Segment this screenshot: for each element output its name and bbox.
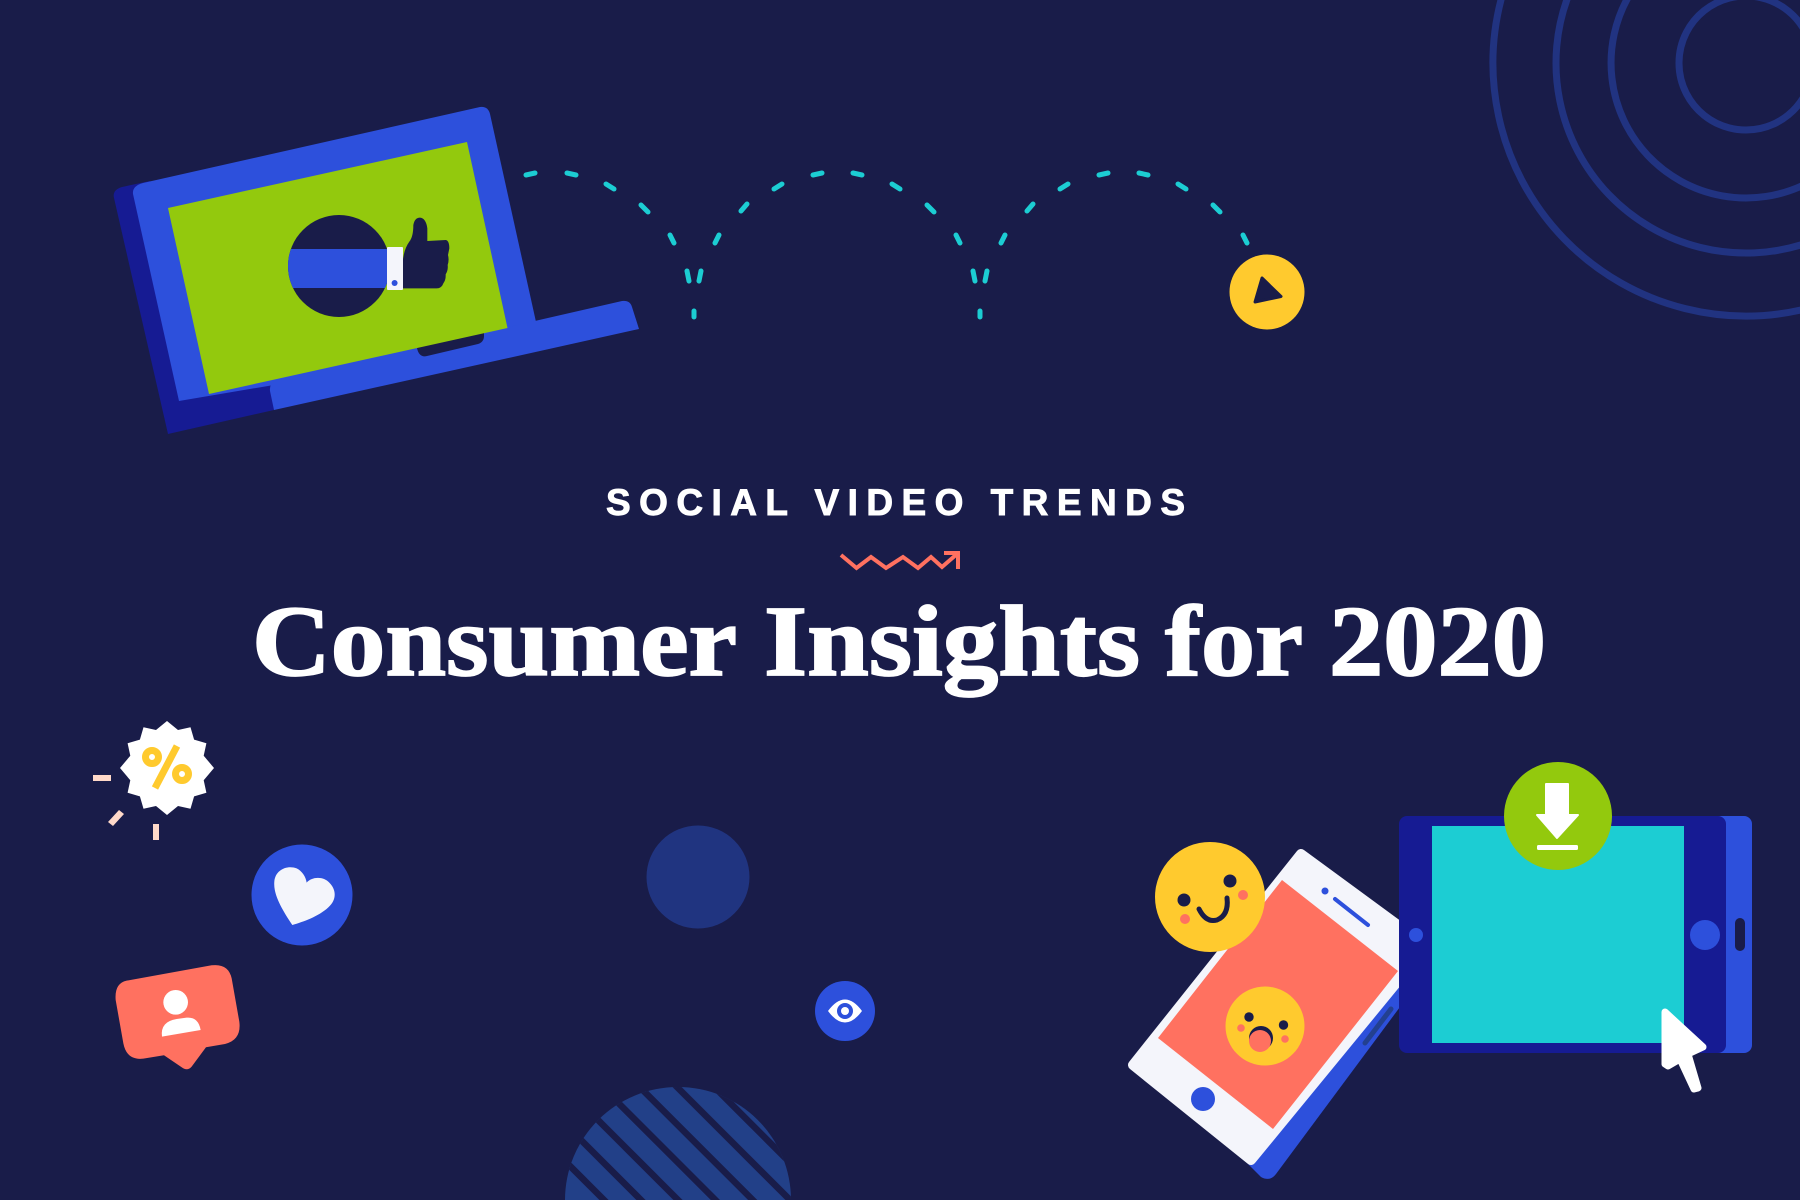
arm sleeve xyxy=(285,249,389,288)
icon: profile speech bubble xyxy=(116,965,240,1069)
concentric rings xyxy=(1493,0,1800,316)
laptop shadow side xyxy=(114,181,300,434)
icon: trending zigzag arrow xyxy=(841,553,958,569)
tablet slot xyxy=(1735,918,1745,951)
phone body xyxy=(1133,854,1425,1160)
phone illustration xyxy=(1133,854,1425,1179)
subtitle: SOCIAL VIDEO TRENDS xyxy=(606,482,1185,523)
tablet home button xyxy=(1690,920,1720,950)
laptop illustration xyxy=(114,107,639,434)
tablet left dot xyxy=(1409,928,1423,942)
dashed bounce path xyxy=(526,173,1247,317)
tablet illustration xyxy=(1399,816,1752,1053)
striped semicircle xyxy=(565,1087,791,1200)
title: Consumer xyxy=(252,585,737,697)
title: 2020 xyxy=(1329,585,1546,697)
percent sign xyxy=(146,746,188,788)
icon: eye badge xyxy=(815,981,875,1041)
icon: heart badge xyxy=(252,844,352,946)
laptop base xyxy=(270,301,639,410)
phone slit xyxy=(1365,1009,1391,1043)
surprised face emoji xyxy=(1226,986,1304,1066)
phone speaker line xyxy=(1335,899,1368,925)
phone home button xyxy=(1191,1087,1215,1111)
phone screen xyxy=(1158,880,1398,1129)
badge burst xyxy=(120,721,214,815)
tablet back xyxy=(1690,816,1752,1053)
phone speaker dot xyxy=(1322,888,1328,894)
tablet screen xyxy=(1432,826,1684,1043)
hand xyxy=(402,218,449,288)
icon: percent badge xyxy=(93,721,214,840)
smiling face emoji xyxy=(1155,842,1265,952)
laptop screen xyxy=(168,142,508,394)
tablet body xyxy=(1399,816,1726,1053)
spark ticks xyxy=(93,775,159,840)
cuff xyxy=(387,247,403,290)
title xyxy=(252,585,1546,697)
decorative blue circle xyxy=(646,826,750,928)
cuff button xyxy=(392,280,398,286)
laptop trackpad notch xyxy=(417,325,484,356)
icon: mouse cursor xyxy=(1665,1012,1703,1089)
title: for xyxy=(1165,585,1303,697)
thumbs up icon xyxy=(285,215,449,317)
profile circle xyxy=(288,215,390,317)
icon: download badge xyxy=(1504,762,1612,870)
play button icon xyxy=(1230,254,1304,330)
title: Insights xyxy=(764,585,1140,697)
laptop lid xyxy=(133,107,540,401)
phone back xyxy=(1248,950,1420,1179)
